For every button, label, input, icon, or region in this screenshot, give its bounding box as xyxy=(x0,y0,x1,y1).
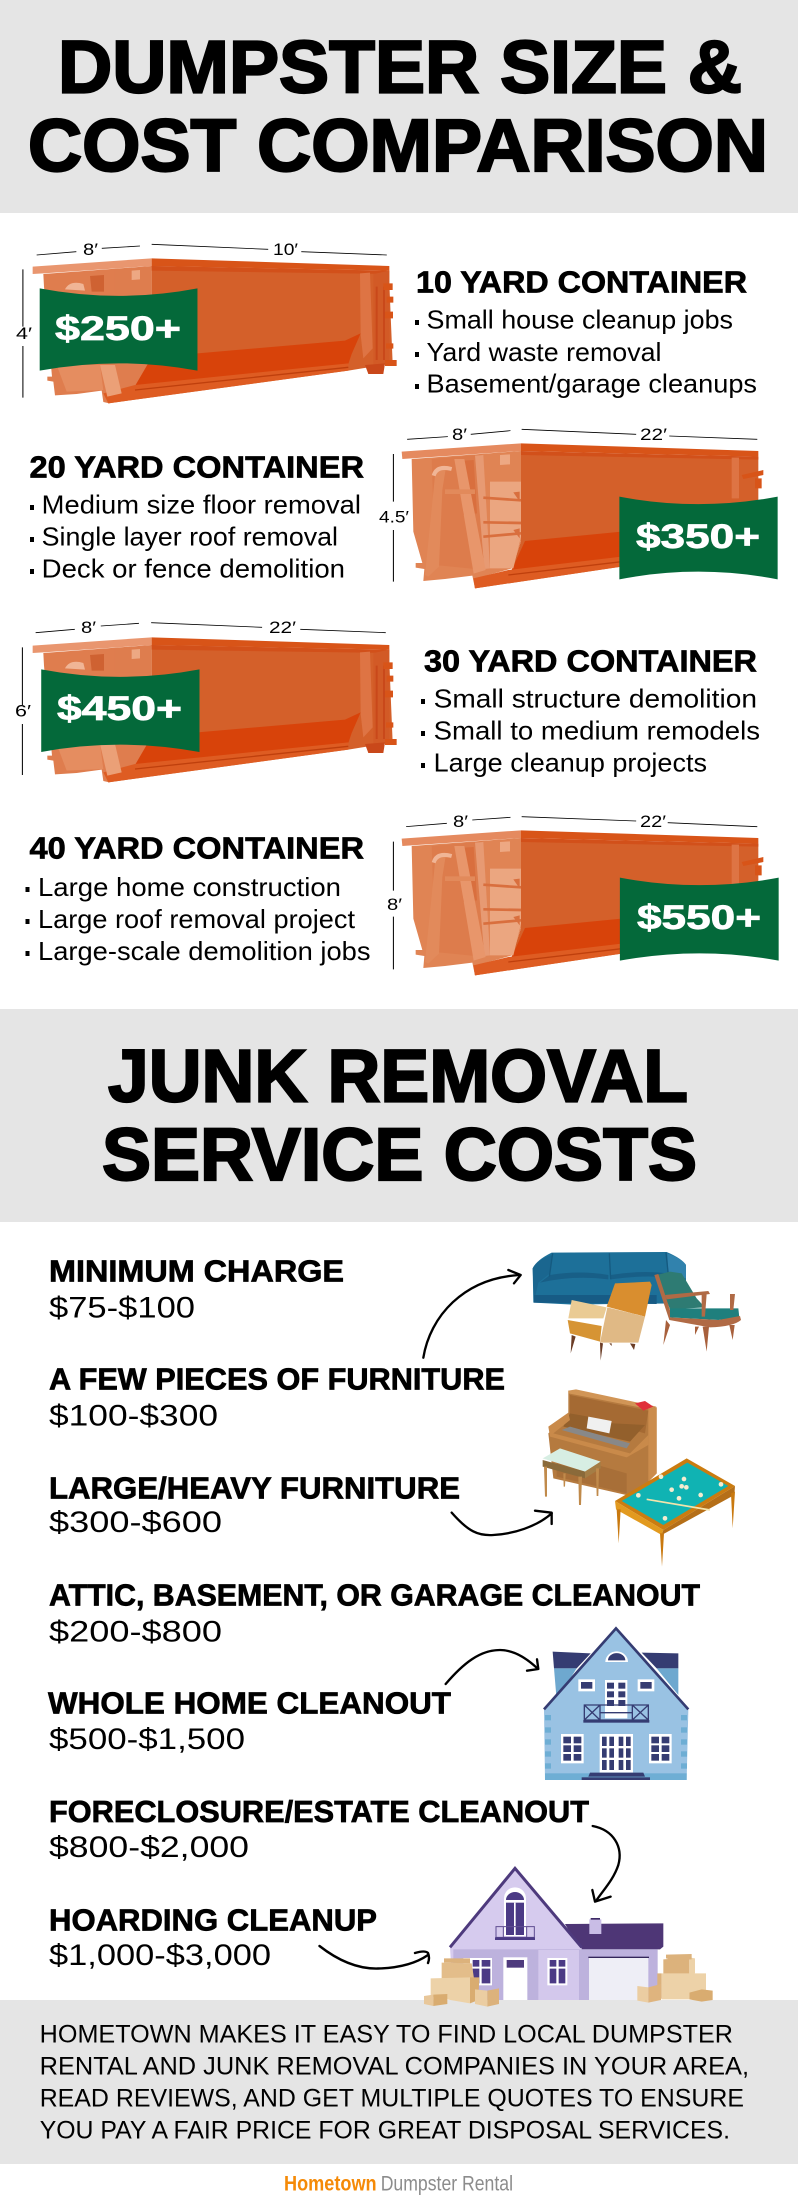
icon: purple house with boxes xyxy=(424,1868,713,2007)
cost item: large/heavy furniture: $300-$600 xyxy=(49,1506,222,1539)
icon: blue house xyxy=(544,1628,688,1780)
cost item: foreclosure/estate cleanout xyxy=(49,1795,589,1864)
dumpster image: 30 yard xyxy=(33,637,397,782)
dumpster image: 20 yard xyxy=(402,443,763,588)
cost item: minimum charge: $75-$100 xyxy=(49,1291,195,1324)
heading: junk removal service costs xyxy=(102,1035,697,1196)
list: 10 yard uses: Small house cleanup jobs xyxy=(426,305,733,335)
price badge: $450+: $450+ xyxy=(57,690,182,728)
dimension lines: 40 yard: 8′ xyxy=(387,896,402,914)
icon: sofa and armchairs xyxy=(533,1252,741,1361)
cost item: a few pieces of furniture xyxy=(49,1363,505,1432)
heading: junk removal service costs: SERVICE COSTS xyxy=(102,1113,697,1196)
text block: footer message: READ REVIEWS, AND GET MULTIPLE QUOTES TO ENSURE xyxy=(40,2084,744,2112)
list: 40 yard uses xyxy=(26,872,370,966)
list: 30 yard uses: Small to medium remodels xyxy=(434,716,760,746)
dumpster image: 10 yard xyxy=(33,258,397,403)
cost item: a few pieces of furniture: A FEW PIECES OF FURNITURE xyxy=(49,1363,505,1397)
dimension lines: 20 yard: 8′ xyxy=(452,426,467,444)
price badge: $250+: $250+ xyxy=(55,310,181,348)
dimension lines: 10 yard: 10′ xyxy=(273,241,298,259)
cost item: whole home cleanout: $500-$1,500 xyxy=(49,1723,245,1756)
price badge: $550+: $550+ xyxy=(637,899,761,937)
arrow: to purple house xyxy=(592,1826,620,1902)
cost item: attic, basement, or garage cleanout: ATTIC, BASEMENT, OR GARAGE CLEANOUT xyxy=(49,1579,700,1613)
boxes: left pile xyxy=(424,1958,499,2007)
dimension lines: 30 yard xyxy=(15,619,386,775)
cost item: large/heavy furniture: LARGE/HEAVY FURNITURE xyxy=(49,1472,460,1506)
cost item: a few pieces of furniture: $100-$300 xyxy=(49,1399,218,1432)
cost item: whole home cleanout xyxy=(48,1687,451,1756)
title xyxy=(28,26,768,187)
arrow: to hoarding house xyxy=(320,1946,429,1969)
heading: 10 yard container: 10 YARD CONTAINER xyxy=(416,265,747,300)
boxes: right pile xyxy=(637,1954,713,2003)
arrow: to sofa set xyxy=(423,1270,521,1358)
text block: footer message xyxy=(40,2021,749,2144)
arrow: to blue house xyxy=(446,1650,538,1684)
panel: footer message band xyxy=(0,2000,798,2164)
list: 30 yard uses xyxy=(421,684,760,778)
dimension lines: 10 yard: 8′ xyxy=(83,241,98,259)
list: 20 yard uses xyxy=(30,489,361,583)
list: 30 yard uses: Large cleanup projects xyxy=(434,748,707,778)
cost item: attic, basement, or garage cleanout: $200-$800 xyxy=(49,1616,222,1649)
logo: Hometown Dumpster Rental: Dumpster Rental xyxy=(381,2172,513,2196)
price badge: $350+: $350+ xyxy=(636,518,760,556)
panel: junk removal heading band xyxy=(0,1009,798,1222)
dimension lines: 30 yard: 22′ xyxy=(269,619,296,637)
list: 10 yard uses xyxy=(415,305,757,399)
panel: 40 yard container xyxy=(26,813,779,975)
price badge: $250+ xyxy=(40,288,197,371)
cost item: hoarding cleanup xyxy=(49,1904,377,1972)
heading: 30 yard container: 30 YARD CONTAINER xyxy=(424,644,757,679)
cost item: hoarding cleanup: HOARDING CLEANUP xyxy=(49,1904,377,1938)
heading: 40 yard container: 40 YARD CONTAINER xyxy=(30,831,364,866)
price badge: $550+ xyxy=(620,878,779,961)
list: 20 yard uses: Single layer roof removal xyxy=(42,521,338,551)
dimension lines: 20 yard: 4.5′ xyxy=(379,509,409,527)
dimension lines: 40 yard: 22′ xyxy=(640,813,666,831)
list: 40 yard uses: Large-scale demolition jobs xyxy=(38,936,370,966)
cost item: foreclosure/estate cleanout: FORECLOSURE/ESTATE CLEANOUT xyxy=(49,1795,589,1829)
list: 10 yard uses: Yard waste removal xyxy=(426,337,662,367)
heading: 20 yard container: 20 YARD CONTAINER xyxy=(30,449,364,484)
cost item: minimum charge: MINIMUM CHARGE xyxy=(49,1255,344,1289)
panel: title band xyxy=(0,0,798,213)
dimension lines: 30 yard: 6′ xyxy=(15,703,31,721)
price badge: $450+ xyxy=(41,669,200,752)
list: 40 yard uses: Large home construction xyxy=(38,872,341,902)
icon: piano, bench and pool table xyxy=(543,1389,735,1567)
cost item: large/heavy furniture xyxy=(49,1472,460,1539)
arrow: to piano and pool table xyxy=(452,1511,552,1535)
panel: 30 yard container xyxy=(15,619,760,782)
cost item: minimum charge xyxy=(49,1255,344,1324)
logo: Hometown Dumpster Rental xyxy=(284,2172,513,2196)
dimension lines: 30 yard: 8′ xyxy=(81,619,96,637)
cost item: hoarding cleanup: $1,000-$3,000 xyxy=(49,1939,271,1972)
heading: junk removal service costs: JUNK REMOVAL xyxy=(108,1035,688,1118)
dumpster image: 40 yard xyxy=(402,830,763,975)
list: 20 yard uses: Medium size floor removal xyxy=(42,489,361,519)
dimension lines: 40 yard xyxy=(387,813,757,969)
title: COST COMPARISON xyxy=(28,104,768,187)
list: 30 yard uses: Small structure demolition xyxy=(434,684,757,714)
dimension lines: 40 yard: 8′ xyxy=(453,813,468,831)
cost item: attic, basement, or garage cleanout xyxy=(49,1579,700,1649)
dimension lines: 20 yard: 22′ xyxy=(640,426,667,444)
dimension lines: 10 yard: 4′ xyxy=(16,325,32,343)
text block: footer message: RENTAL AND JUNK REMOVAL COMPANIES IN YOUR AREA, xyxy=(40,2052,749,2080)
text block: footer message: HOMETOWN MAKES IT EASY TO FIND LOCAL DUMPSTER xyxy=(40,2021,733,2049)
dimension lines: 20 yard xyxy=(379,426,757,582)
logo: Hometown Dumpster Rental: Hometown xyxy=(284,2172,377,2196)
text block: footer message: YOU PAY A FAIR PRICE FOR GREAT DISPOSAL SERVICES. xyxy=(40,2116,730,2144)
price badge: $350+ xyxy=(619,497,778,579)
cost item: foreclosure/estate cleanout: $800-$2,000 xyxy=(49,1831,249,1864)
title: DUMPSTER SIZE & xyxy=(58,26,742,109)
dimension lines: 10 yard xyxy=(16,241,387,398)
panel: 10 yard container xyxy=(16,241,757,403)
cost item: whole home cleanout: WHOLE HOME CLEANOUT xyxy=(48,1687,451,1721)
list: 20 yard uses: Deck or fence demolition xyxy=(42,553,345,583)
list: 10 yard uses: Basement/garage cleanups xyxy=(426,369,757,399)
panel: 20 yard container xyxy=(30,426,778,588)
list: 40 yard uses: Large roof removal project xyxy=(38,904,356,934)
